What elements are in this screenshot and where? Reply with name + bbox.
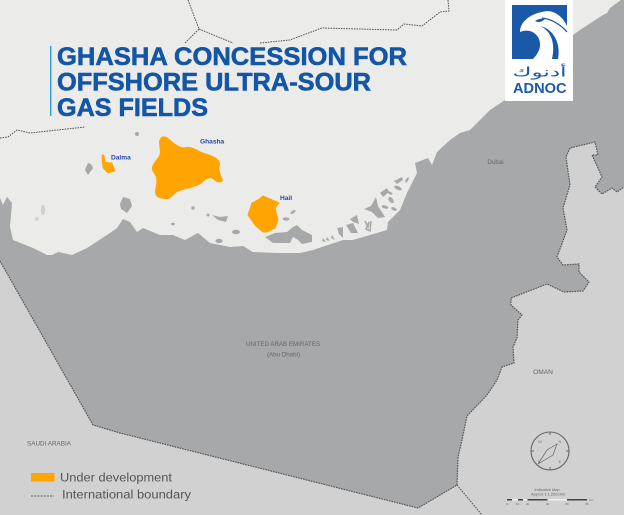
title: GAS FIELDS xyxy=(57,94,208,122)
scale bar: 60 xyxy=(565,502,569,506)
logo: ADNOC xyxy=(505,0,573,101)
logo: ADNOC: ADNOC xyxy=(513,81,567,97)
label: Saudi Arabia: SAUDI ARABIA xyxy=(27,442,71,448)
scale bar: 20 xyxy=(526,502,529,506)
scale bar: Indicative Map xyxy=(534,487,560,492)
scale bar: 40 xyxy=(546,502,549,506)
logo: ADNOC: أدنوك xyxy=(512,64,566,80)
compass: W xyxy=(538,439,542,444)
title: OFFSHORE ULTRA-SOUR xyxy=(57,68,371,96)
legend xyxy=(31,470,192,502)
label: United Arab Emirates: UNITED ARAB EMIRATES xyxy=(246,341,320,348)
compass: S xyxy=(538,459,541,464)
legend: Under development xyxy=(60,470,173,484)
scale bar: 10 xyxy=(516,502,519,506)
compass xyxy=(531,432,569,470)
scale bar: 0 xyxy=(507,502,509,506)
gas field: Ghasha xyxy=(152,136,223,199)
scale bar: 80 xyxy=(585,502,589,506)
label: Dalma: Dalma xyxy=(111,154,131,162)
label: Dubai: Dubai xyxy=(487,159,504,166)
scale bar: Approx 1:1,250,000 xyxy=(531,492,566,496)
scale bar xyxy=(507,487,594,506)
label: Hail: Hail xyxy=(280,195,292,202)
title: GHASHA CONCESSION FOR xyxy=(57,43,407,71)
label: Abu Dhabi: (Abu Dhabi) xyxy=(267,352,300,358)
compass: E xyxy=(559,459,562,464)
gas field: Dalma xyxy=(102,155,115,173)
title xyxy=(50,43,407,122)
compass: N xyxy=(559,439,562,444)
offshore islands xyxy=(85,132,410,244)
pale islands xyxy=(35,205,45,221)
scale bar: Km xyxy=(589,498,594,502)
sea: Arabian Gulf xyxy=(0,0,621,255)
label: Oman: OMAN xyxy=(533,369,553,376)
label: Ghasha: Ghasha xyxy=(200,138,225,146)
gas field: Hail xyxy=(248,196,279,232)
legend: International boundary xyxy=(62,488,192,502)
